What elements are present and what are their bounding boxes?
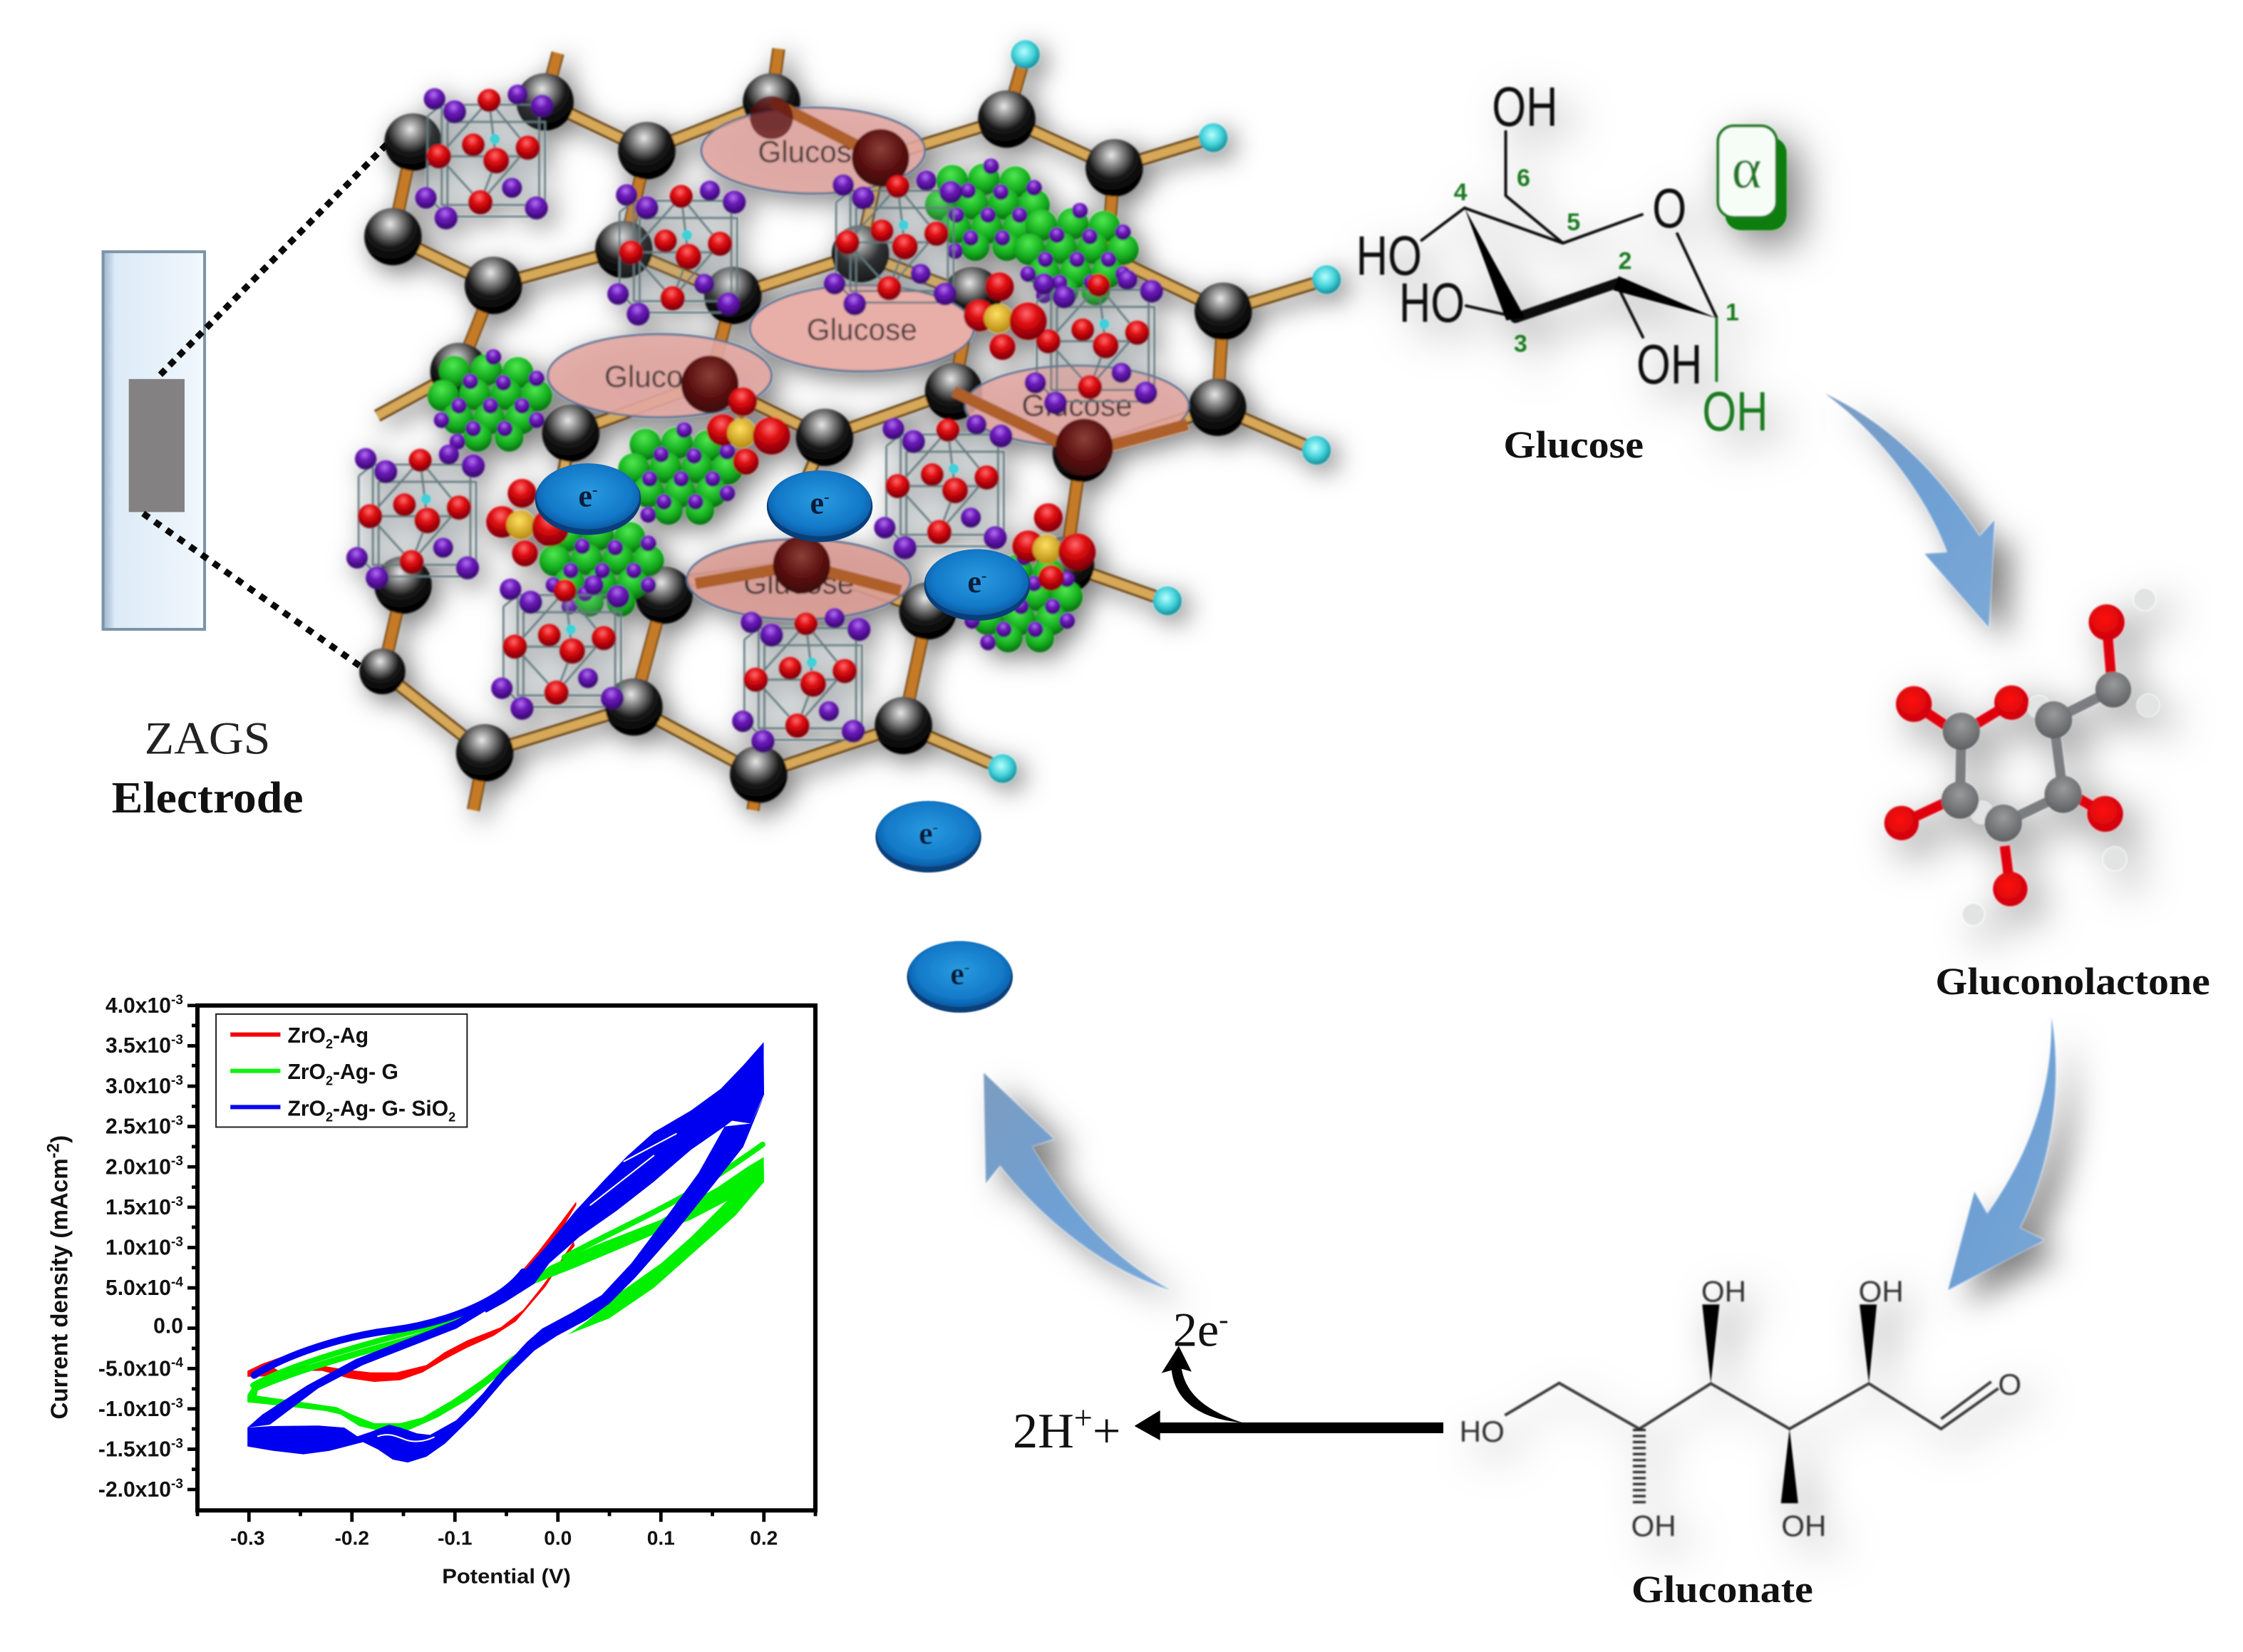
arrow: main black reaction arrow	[1135, 1410, 1443, 1440]
electron: e- on network 1: e	[578, 478, 592, 513]
molecule: glucose	[1356, 76, 1787, 443]
y axis title: )	[46, 1135, 73, 1143]
y axis tick labels: 1.5x10	[105, 1196, 171, 1219]
electron: e- on network 3: e	[967, 564, 981, 599]
electron: e- on network 2: -	[824, 487, 830, 505]
legend: -Ag- G	[333, 1060, 398, 1084]
y axis tick labels: -3	[171, 1073, 183, 1088]
gluconate atoms: OH	[1631, 1509, 1676, 1542]
legend: 2	[326, 1037, 333, 1051]
label: 2e-: 2e	[1173, 1303, 1219, 1357]
electron: e- travelling 1: e	[919, 816, 933, 851]
glucose atoms	[1356, 76, 1768, 443]
legend	[216, 1014, 467, 1127]
chart: cyclic voltammetry	[43, 993, 815, 1589]
glucose wedge bonds	[1465, 208, 1716, 321]
plot data curves	[247, 1042, 764, 1462]
electron: e- on network 2: e	[810, 485, 824, 520]
glucose atoms: OH	[1702, 380, 1768, 443]
label: ZAGS: ZAGS	[145, 713, 270, 764]
gluconate atoms: OH	[1859, 1274, 1904, 1308]
gluconate atoms: HO	[1460, 1415, 1505, 1448]
arrow: glucose to gluconolactone	[1825, 393, 1994, 627]
axis ticks	[187, 1006, 815, 1522]
x axis tick labels: 0.2	[750, 1527, 778, 1549]
electron: e- on network 3: -	[981, 567, 986, 584]
x axis title: Potential (V)	[442, 1566, 571, 1589]
label: 2H+ +: 2H	[1013, 1403, 1074, 1459]
panel: ZAGS electrode	[103, 126, 405, 764]
y axis tick labels: -3	[171, 1436, 183, 1451]
glucose carbon numbers: 6	[1517, 165, 1530, 192]
glucose labels on ellipses: Glucose	[604, 360, 715, 393]
label: 2e-: -	[1219, 1303, 1229, 1335]
x axis tick labels: -0.3	[230, 1527, 264, 1549]
graphene carbon atoms	[359, 73, 1252, 803]
y axis tick labels: -3	[171, 1194, 183, 1209]
y axis tick labels: -1.5x10	[98, 1437, 171, 1461]
y axis tick labels: 1.0x10	[105, 1236, 171, 1259]
glucose atoms: OH	[1636, 333, 1702, 396]
glucose skeleton	[1422, 132, 1716, 337]
electron: e- travelling 1	[875, 801, 981, 872]
legend: -Ag	[333, 1024, 368, 1048]
y axis tick labels: -2.0x10	[98, 1478, 171, 1502]
glucose labels on ellipses: Glucose	[1022, 388, 1133, 422]
glucose labels on ellipses: Glucose	[758, 135, 868, 168]
x axis tick labels: -0.1	[438, 1527, 472, 1549]
graphene bonds	[377, 48, 1326, 810]
legend: ZrO	[287, 1060, 326, 1084]
glucose atoms: HO	[1399, 272, 1465, 334]
electron: e- travelling 2: e	[950, 956, 964, 991]
y axis tick labels: 0.0	[153, 1314, 183, 1338]
legend: 2	[448, 1110, 455, 1124]
panel: graphene network with crystals	[346, 40, 1341, 810]
glucose carbon numbers: 4	[1454, 179, 1468, 206]
lactone oxygen bonds	[1902, 622, 2111, 889]
blue curve ZrO2-Ag-G-SiO2	[247, 1042, 764, 1462]
adsorbed dark spheres	[681, 96, 1113, 594]
covered bonds over ellipses	[696, 102, 1187, 591]
glucose atoms: HO	[1356, 224, 1422, 286]
electron: e- on network 2	[767, 470, 872, 542]
dotted zoom line upper	[160, 126, 405, 375]
electron: e- travelling 2: -	[964, 959, 969, 976]
label: Glucose: Glucose	[1503, 423, 1644, 466]
y axis tick labels: 3.0x10	[105, 1075, 171, 1098]
electron: e- travelling 2	[907, 941, 1013, 1013]
y axis title: -2	[43, 1143, 63, 1158]
y axis tick labels: -3	[171, 1396, 183, 1411]
molecule: gluconate	[1460, 1274, 2021, 1542]
gluconate atoms	[1460, 1274, 2021, 1542]
electron: e- on network 3	[924, 549, 1030, 621]
lactone carbons	[1942, 672, 2131, 842]
glucose carbon numbers: 3	[1514, 331, 1527, 358]
y axis tick labels: -3	[171, 993, 183, 1008]
y axis tick labels: -3	[171, 1033, 183, 1048]
lactone hydrogens	[1962, 589, 2159, 925]
label: 2H+ +: +	[1093, 1403, 1120, 1459]
label: Gluconate: Gluconate	[1631, 1568, 1813, 1611]
y axis tick labels: 3.5x10	[105, 1034, 171, 1058]
y axis tick labels: -1.0x10	[98, 1398, 171, 1421]
label: 2H+ +: +	[1074, 1400, 1093, 1436]
lactone bonds	[1960, 690, 2113, 823]
y axis tick labels	[98, 993, 183, 1502]
y axis tick labels: -3	[171, 1477, 183, 1492]
glucose atoms: OH	[1492, 76, 1558, 138]
active gray area	[129, 379, 185, 512]
glucose carbon numbers: 5	[1567, 209, 1580, 236]
crystal unit cells	[346, 85, 1163, 753]
legend: ZrO	[287, 1024, 326, 1048]
label: Gluconolactone: Gluconolactone	[1935, 960, 2210, 1003]
electron: e- travelling 1: -	[933, 818, 938, 836]
x axis tick labels: -0.2	[335, 1527, 369, 1549]
electron: e- on network 1	[535, 463, 641, 535]
y axis tick labels: -4	[171, 1356, 183, 1370]
legend: -Ag- G- SiO	[333, 1097, 448, 1120]
dotted zoom line lower	[143, 513, 389, 686]
y axis tick labels: -3	[171, 1234, 183, 1249]
glucose labels on ellipses	[604, 135, 1133, 600]
glucose labels on ellipses: Glucose	[743, 567, 854, 600]
label: Electrode: Electrode	[112, 774, 304, 822]
y axis tick labels: 2.5x10	[105, 1115, 171, 1139]
x axis tick labels: 0.0	[544, 1527, 572, 1549]
legend: 2	[326, 1110, 333, 1124]
molecule: gluconolactone	[1884, 589, 2159, 925]
glucose ellipses	[548, 108, 1189, 619]
y axis tick labels: 2.0x10	[105, 1155, 171, 1179]
gluconate skeleton	[1505, 1382, 1999, 1429]
y axis title: Current density (mAcm	[46, 1158, 73, 1419]
x axis tick labels: 0.1	[647, 1527, 675, 1549]
green nanoparticle clusters	[428, 158, 1139, 652]
gluconate hashed bond	[1636, 1429, 1643, 1504]
y axis tick labels: 4.0x10	[105, 994, 171, 1018]
C1 green bond	[1716, 318, 1717, 382]
arrow: curved arrow to 2e-	[1162, 1346, 1264, 1429]
gluconate atoms: OH	[1701, 1274, 1746, 1308]
glucose atoms: O	[1652, 177, 1686, 239]
red curve ZrO2-Ag	[247, 1202, 576, 1382]
arrow: gluconolactone to gluconate	[1948, 1017, 2056, 1290]
x axis tick labels	[230, 1527, 778, 1549]
glucose carbon numbers: 2	[1618, 247, 1631, 274]
y axis tick labels: 5.0x10	[105, 1276, 171, 1300]
gluconate wedges	[1702, 1304, 1877, 1503]
y axis tick labels: -4	[171, 1275, 183, 1290]
electron: e- on network 1: -	[592, 480, 597, 498]
gluconate atoms: OH	[1781, 1509, 1826, 1542]
y axis tick labels: -3	[171, 1114, 183, 1129]
glucose labels on ellipses: Glucose	[807, 313, 917, 346]
alpha badge: α	[1731, 137, 1762, 200]
legend: ZrO	[287, 1097, 326, 1120]
y axis tick labels: -3	[171, 1154, 183, 1169]
glucose carbon numbers	[1454, 165, 1739, 358]
lactone oxygens	[1884, 604, 2125, 907]
y axis tick labels: -5.0x10	[98, 1357, 171, 1380]
arrow: gluconate to electrode	[984, 1073, 1170, 1290]
hydrogen end atoms	[988, 40, 1341, 783]
sulfate-like silica groups	[486, 272, 1095, 591]
gluconate atoms: O	[1998, 1368, 2021, 1401]
white gaps in blue band	[378, 1134, 676, 1442]
glucose carbon numbers: 1	[1726, 299, 1739, 326]
plot frame	[197, 1006, 815, 1510]
green curve ZrO2-Ag-G	[247, 1145, 764, 1430]
legend: 2	[326, 1073, 333, 1088]
electrode plate	[103, 252, 205, 629]
alpha badge	[1718, 126, 1787, 230]
